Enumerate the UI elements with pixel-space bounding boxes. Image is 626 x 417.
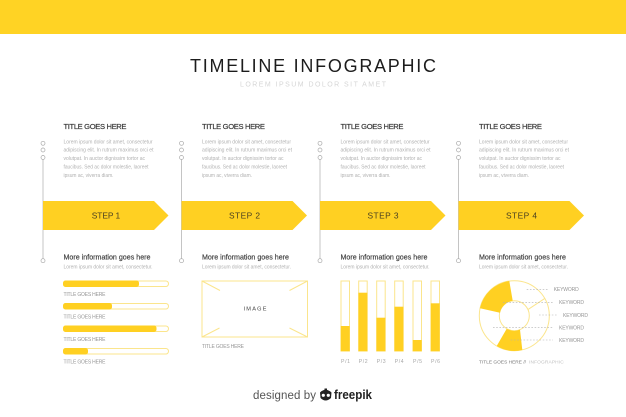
text block: step 3: faucibus. Sed ac dolor molestie, laoreet (340, 164, 426, 170)
caption: step 4: Lorem ipsum dolor sit amet, consectetur. (479, 264, 568, 270)
panel: step 4 (456, 122, 588, 365)
text block: step 1: ipsum ac, viverra diam. (64, 173, 114, 179)
bar 2 label: TITLE GOES HERE (64, 314, 106, 320)
progress bars (63, 280, 168, 366)
credit: designed by freepik: designed by (253, 390, 316, 402)
keyword leader lines (493, 289, 558, 340)
bar chart labels: P/4 (395, 359, 404, 365)
heading: step 2: TITLE GOES HERE (202, 122, 265, 131)
heading: step 1: TITLE GOES HERE (64, 122, 126, 131)
donut caption: TITLE GOES HERE // (479, 359, 527, 365)
freepik wordmark: freepik (334, 388, 372, 402)
heading: step 3: TITLE GOES HERE (340, 122, 404, 131)
keyword labels: KEYWORD (559, 325, 584, 331)
panel: step 3 (318, 122, 446, 365)
bar chart labels: P/6 (431, 359, 440, 365)
text block: step 2: adipiscing elit. In rutrum maximus orci et (202, 148, 292, 154)
arrow label: step 4: STEP 4 (506, 210, 537, 220)
text block: step 4: volutpat. In auctor dignissim tortor ac (479, 156, 561, 162)
text block: step 2: Lorem ipsum dolor sit amet, consectetur (202, 139, 291, 145)
timeline: step 2 (180, 141, 184, 263)
donut segment 2 (497, 329, 522, 351)
credit: designed by freepik (253, 388, 372, 402)
text block: step 3: volutpat. In auctor dignissim tortor ac (340, 156, 422, 162)
bar chart labels: P/2 (359, 359, 368, 365)
text block: step 3: adipiscing elit. In rutrum maximus orci et (340, 148, 431, 154)
panel: step 2 (180, 122, 308, 350)
donut segment 1 (480, 281, 513, 313)
text block: step 1: faucibus. Sed ac dolor molestie, laoreet (64, 164, 149, 170)
text block: step 3: Lorem ipsum dolor sit amet, consectetur (340, 139, 430, 145)
bar 3 label: TITLE GOES HERE (64, 337, 106, 343)
text block: step 4: faucibus. Sed ac dolor molestie, laoreet (479, 164, 564, 170)
donut chart (479, 281, 588, 351)
arrow label: step 2: STEP 2 (229, 210, 260, 220)
bar 4 (63, 348, 168, 354)
caption: step 3: Lorem ipsum dolor sit amet, consectetur. (340, 264, 430, 270)
image label: IMAGE (244, 306, 267, 312)
bar 1 (63, 280, 168, 287)
sub-heading: step 3: More information goes here (340, 252, 428, 262)
caption: step 2: Lorem ipsum dolor sit amet, consectetur. (202, 264, 291, 270)
donut caption (479, 359, 564, 365)
text block: step 4: adipiscing elit. In rutrum maximus orci et (479, 148, 569, 154)
arrow label: step 1: STEP 1 (92, 210, 121, 220)
panel: step 1 (41, 122, 168, 366)
text block: step 1 (64, 139, 154, 179)
arrow: step 2 (182, 201, 307, 230)
text block: step 3: ipsum ac, viverra diam. (340, 173, 390, 179)
text block: step 2 (202, 139, 292, 179)
bar chart labels: P/5 (413, 359, 422, 365)
text block: step 4: ipsum ac, viverra diam. (479, 173, 529, 179)
sub-heading: step 1: More information goes here (64, 252, 150, 262)
arrow label: step 3: STEP 3 (368, 210, 399, 220)
text block: step 2: faucibus. Sed ac dolor molestie, laoreet (202, 164, 287, 170)
caption: step 1: Lorem ipsum dolor sit amet, consectetur. (64, 264, 152, 270)
image placeholder (202, 281, 308, 337)
bar 2 (63, 303, 168, 310)
icon: freepik logo (320, 388, 332, 400)
sub-heading: step 2: More information goes here (202, 252, 289, 262)
bar chart (341, 281, 440, 365)
arrow: step 3 (320, 201, 446, 230)
arrow: step 1 (43, 201, 168, 230)
bar chart labels (341, 359, 440, 365)
bar 4 label: TITLE GOES HERE (64, 360, 106, 366)
text block: step 1: Lorem ipsum dolor sit amet, consectetur (64, 139, 153, 145)
heading: step 4: TITLE GOES HERE (479, 122, 542, 131)
text block: step 2: volutpat. In auctor dignissim tortor ac (202, 156, 284, 162)
text block: step 1: volutpat. In auctor dignissim tortor ac (64, 156, 145, 162)
bar 3 (63, 326, 168, 332)
top yellow band (0, 0, 626, 34)
sub-heading: step 4: More information goes here (479, 252, 566, 262)
image caption: TITLE GOES HERE (202, 344, 245, 350)
keyword labels: KEYWORD (554, 287, 579, 293)
text block: step 2: ipsum ac, viverra diam. (202, 173, 252, 179)
timeline: step 3 (318, 141, 322, 263)
text block: step 4: Lorem ipsum dolor sit amet, consectetur (479, 139, 568, 145)
keyword labels: KEYWORD (559, 338, 584, 344)
bar chart labels: P/1 (341, 359, 350, 365)
title: TIMELINE INFOGRAPHIC (190, 56, 436, 76)
keyword labels: KEYWORD (563, 313, 588, 319)
donut caption: INFOGRAPHIC (529, 359, 564, 365)
timeline: step 4 (456, 141, 460, 263)
subtitle: LOREM IPSUM DOLOR SIT AMET (240, 82, 387, 88)
text block: step 4 (479, 139, 569, 179)
bar 1 label: TITLE GOES HERE (64, 292, 106, 298)
text block: step 3 (340, 139, 431, 179)
keyword labels (554, 287, 588, 344)
arrow: step 4 (458, 201, 584, 230)
timeline: step 1 (41, 141, 45, 263)
keyword labels: KEYWORD (559, 300, 584, 306)
bar chart labels: P/3 (377, 359, 386, 365)
text block: step 1: adipiscing elit. In rutrum maximus orci et (64, 148, 154, 154)
